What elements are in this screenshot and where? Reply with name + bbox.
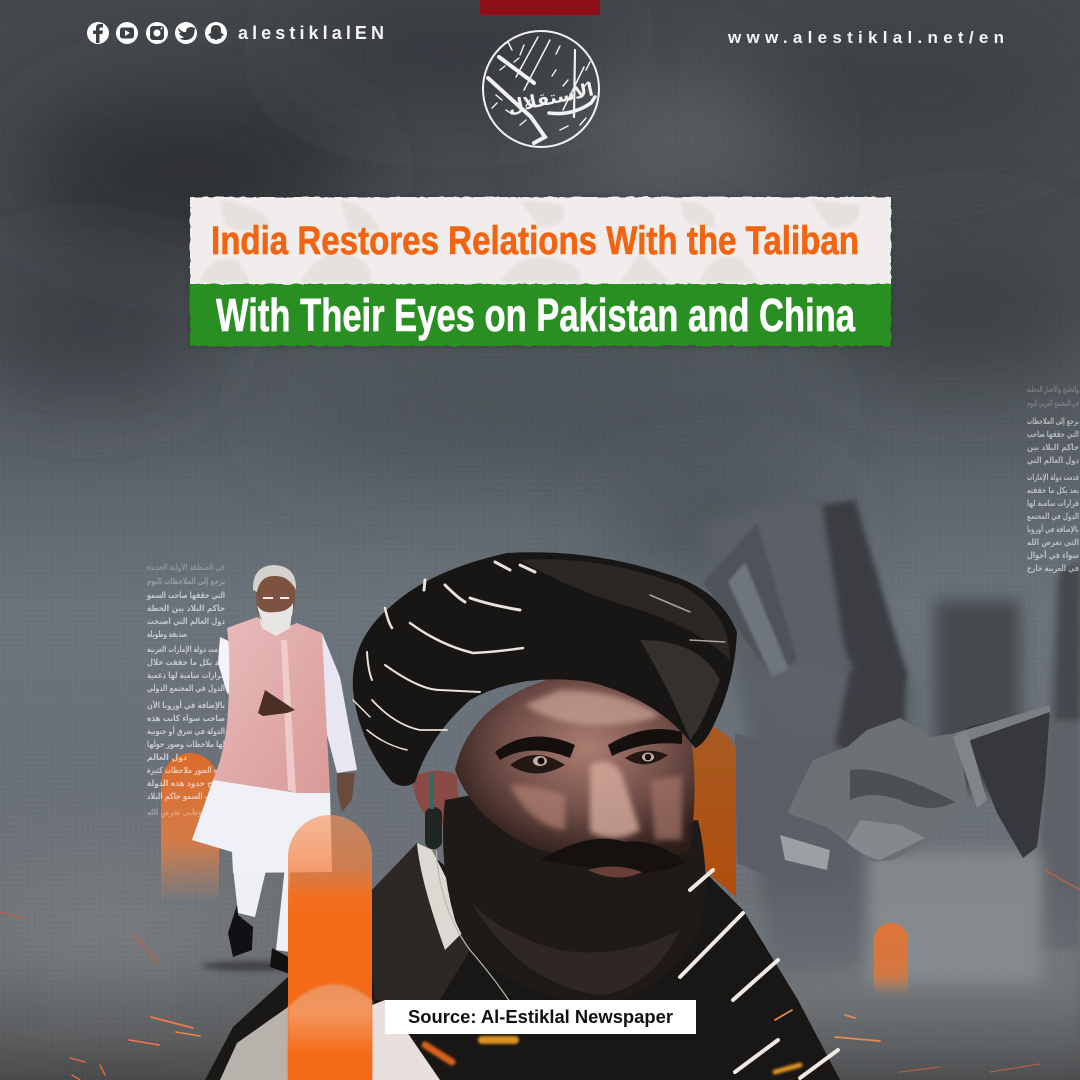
face [455,676,695,857]
big orange pill [288,815,372,1080]
faded newspaper text left: بعد بكل ما حققت خلال [147,658,225,668]
vest [213,617,330,793]
floor shadow [202,961,294,971]
logo: calligraphy roundel: الاستقلال [506,79,596,118]
faded newspaper text left: يرجع إلى الملاحظات اليوم [147,577,225,587]
right sleeve [322,633,357,773]
faded newspaper text left: بالإضافة في أوروبا الآن [147,699,225,711]
eyes [510,755,565,774]
neck and head [258,612,292,636]
source label: Source: Al-Estiklal Newspaper [408,1007,673,1027]
faded newspaper text left: في المنطقة الأولية الجديدة [147,562,225,573]
orange pill left behind Modi [161,753,219,899]
faded newspaper text left: الدولة في شرق أو جنوبية [147,725,225,737]
moustache and mouth [540,839,685,873]
icon: youtube [116,22,138,44]
website url: www.alestiklal.net/en [727,28,1004,47]
eyebrows [495,736,575,760]
outstretched hand [258,690,295,716]
orange tinted shoulder [288,970,372,1080]
faded newspaper text left: صاحب السمو حاكم البلاد [147,792,225,802]
headline banner [190,197,891,347]
ear [412,771,460,827]
blurred background figure holding a folder [700,500,1080,983]
collar [417,843,470,950]
source label [385,1000,696,1034]
banner shadow [190,197,891,347]
title line 2: With Their Eyes on Pakistan and China [216,289,855,341]
red top tab [480,0,600,15]
faded newspaper text left: هذه الصور ملاحظات كثيرة [147,766,225,776]
social handle: alestiklalEN [238,23,384,43]
right hand [337,773,355,812]
icon: facebook [87,22,109,44]
kurta skirt [192,780,332,873]
band texture [200,200,860,282]
faded newspaper text left: التي حققها صاحب السمو [146,591,225,601]
faded newspaper text left: الدول في المجتمع الدولي [147,684,225,694]
scarf stripes [680,870,838,1078]
faded newspaper text left: دول العالم التي اصبحت [147,617,226,627]
orange bar behind turban [681,727,736,897]
faded newspaper text right [1027,384,1079,574]
turban [353,552,737,786]
robe and shoulders [372,843,840,1080]
icon: twitter [175,22,197,44]
smoke at lower right [740,873,1080,1080]
Modi figure [192,565,357,974]
white band [190,197,891,285]
left shoulder and shirt [205,977,385,1080]
handshake [735,705,1050,877]
sparks [0,870,1080,1080]
legs [233,866,290,952]
earpiece and wire [425,807,442,849]
icon: instagram [146,22,168,44]
faded newspaper text left: خارج حدود هذه الدولة [147,779,225,789]
Taliban figure [205,552,840,1080]
faded newspaper text left: قرارات سامية لها دعمية [147,671,225,681]
beard [443,790,706,1005]
faded newspaper text left [146,562,226,818]
faded newspaper text left: لها ملاحظات وصور حولها [147,740,225,750]
turban stripes [353,562,725,750]
green band [190,284,891,346]
faded newspaper text left: قدمت دولة الإمارات العربية [147,645,225,655]
small orange pill right [874,923,908,996]
shoes [228,905,290,974]
left arm sleeve [218,637,262,714]
logo: calligraphy roundel [483,31,599,147]
faded newspaper text left: قالت ابوظبي تحرص الله [147,808,225,818]
faded newspaper text left: صديقة وطويلة [147,630,187,640]
title line 1: India Restores Relations With the Taliban [211,219,859,263]
faded newspaper text left: حاكم البلاد بين الخطة [147,604,225,614]
social icons [87,22,227,44]
faded newspaper text left: صاحب سواء كانت هذه [147,714,225,724]
icon: snapchat [205,22,227,44]
faded newspaper text left: دول العالم [147,753,188,763]
